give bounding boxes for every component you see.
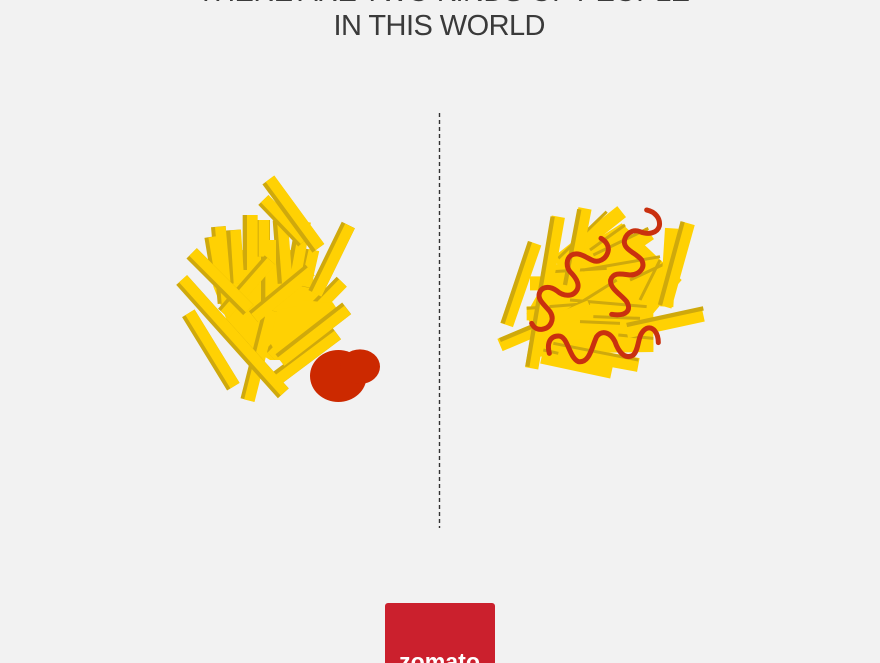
illustration: fries with a dollop of ketchup — [182, 179, 380, 402]
fries pile right — [500, 208, 703, 372]
fries pile left — [182, 179, 350, 401]
title: IN THIS WORLD — [334, 10, 546, 42]
fries foreground — [542, 348, 638, 372]
dashed divider — [438, 113, 440, 528]
ketchup squiggles — [532, 210, 660, 362]
zomato logo — [385, 603, 495, 663]
ketchup dollop — [310, 349, 380, 402]
title — [197, 0, 690, 42]
illustration: fries with squiggled ketchup — [500, 208, 703, 372]
